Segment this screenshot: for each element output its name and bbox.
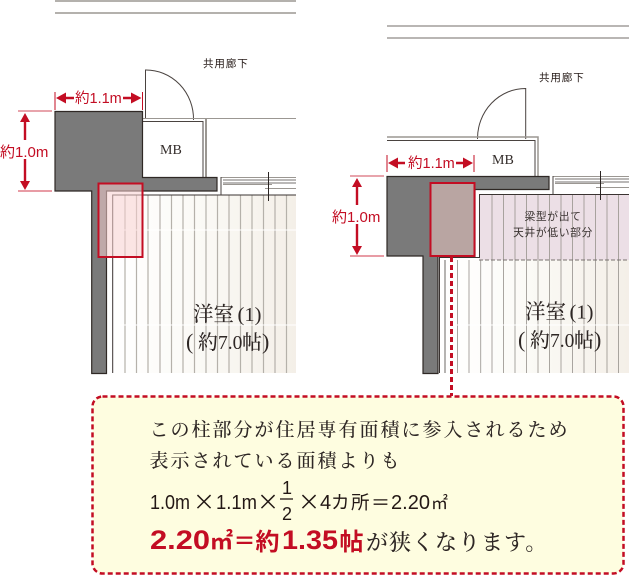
callout box xyxy=(92,396,624,574)
icon: left door swing xyxy=(146,70,194,120)
room label: right: 帖 xyxy=(574,329,594,352)
conclusion: 2.20 xyxy=(150,525,210,555)
formula: 4 xyxy=(320,492,331,514)
balcony window: left xyxy=(221,172,296,201)
low ceiling note: 梁型が出て xyxy=(525,209,581,223)
conclusion xyxy=(150,522,548,557)
dimension: height 1.0m left xyxy=(0,111,52,191)
conclusion: が狭くなります。 xyxy=(366,530,548,555)
room label: right: ) xyxy=(594,327,601,352)
dimension: height 1.0m right xyxy=(332,176,384,256)
conclusion: 約 xyxy=(256,522,280,557)
concrete column: right xyxy=(387,176,549,374)
formula xyxy=(150,478,448,524)
room label: left: 7.0 xyxy=(218,333,242,354)
room label: left: 約 xyxy=(198,331,218,354)
callout text line 2: 表示されている面積よりも xyxy=(150,450,402,472)
conclusion: ＝ xyxy=(234,524,256,556)
dimension: height 1.0m left: 約1.0m xyxy=(0,144,48,161)
MB label: right: MB xyxy=(492,153,514,168)
room label: right xyxy=(518,300,601,352)
corridor and MB walls: left xyxy=(143,118,296,177)
room label: right: 洋室 xyxy=(525,300,566,324)
low ceiling note xyxy=(513,209,593,239)
room label: left: (1) xyxy=(238,304,261,326)
room label: left: ) xyxy=(262,329,269,354)
room label: left: 帖 xyxy=(242,331,262,354)
dimension: height 1.0m right: 約1.0m xyxy=(332,209,380,226)
dimension: width 1.1m left: 約1.1m xyxy=(75,90,122,107)
callout text line 1: この柱部分が住居専有面積に参入されるため xyxy=(150,419,570,441)
conclusion: 帖 xyxy=(340,522,364,557)
room label: left: ( xyxy=(186,329,193,354)
formula: ＝ xyxy=(371,488,390,515)
dimension: width 1.1m right: 約1.1m xyxy=(408,155,455,172)
conclusion: 1.35 xyxy=(282,525,338,555)
highlighted column area: right xyxy=(430,183,474,256)
formula: × xyxy=(257,485,279,517)
dotted leader line xyxy=(450,257,453,396)
room label: left: 洋室 xyxy=(193,303,234,326)
conclusion: ㎡ xyxy=(210,522,233,556)
formula: カ xyxy=(331,489,350,515)
formula: 1.1m xyxy=(216,492,257,514)
panel: right floor plan xyxy=(332,26,629,374)
room floor: left xyxy=(112,195,296,373)
room label: left xyxy=(186,303,269,354)
formula: 1 xyxy=(282,478,292,498)
formula: 1.0m xyxy=(150,492,190,514)
dimension: width 1.1m left xyxy=(55,90,142,110)
balcony window: right xyxy=(553,171,629,200)
formula: 所 xyxy=(351,489,370,515)
room label: right: 約 xyxy=(530,329,550,352)
room floor: right xyxy=(440,194,629,373)
room label: right: (1) xyxy=(570,302,593,324)
panel: left floor plan xyxy=(0,1,296,374)
dimension: width 1.1m right xyxy=(387,155,474,172)
formula: 2 xyxy=(282,504,292,524)
callout xyxy=(92,396,624,574)
MB label: left: MB xyxy=(160,143,182,158)
formula: × xyxy=(193,485,215,517)
highlighted column area: left xyxy=(98,184,142,257)
corridor label: left: 共用廊下 xyxy=(203,57,249,70)
formula: ㎡ xyxy=(431,489,448,514)
concrete column: left xyxy=(55,112,217,374)
room label: right: 7.0 xyxy=(550,331,574,352)
icon: right door swing xyxy=(477,88,526,139)
low ceiling note: 天井が低い部分 xyxy=(513,225,593,239)
room label: right: ( xyxy=(518,327,525,352)
corridor label: right: 共用廊下 xyxy=(539,71,585,84)
formula: 2.20 xyxy=(391,492,430,514)
formula: × xyxy=(298,485,320,517)
corridor and MB walls: right xyxy=(387,137,538,176)
